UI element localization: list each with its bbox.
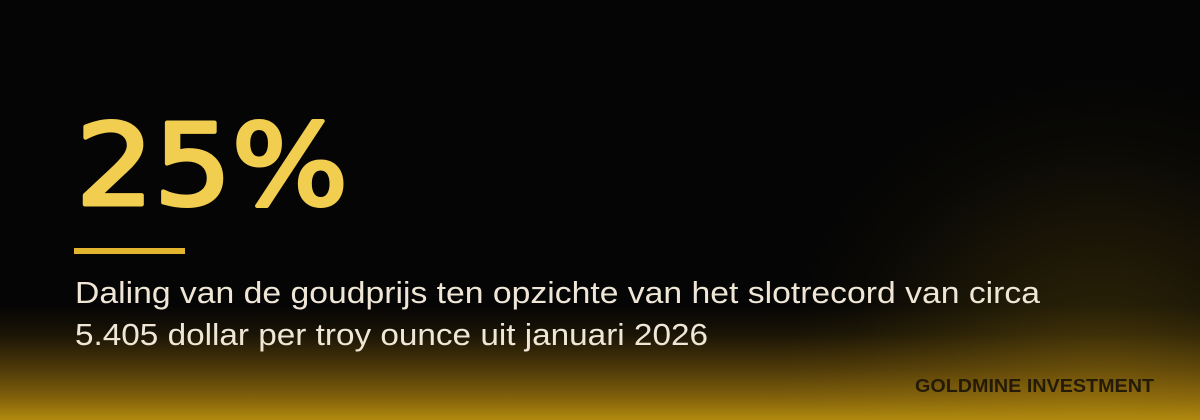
big figure: 25%: 25%: [76, 102, 348, 232]
brand label: GOLDMINE INVESTMENT: [915, 375, 1155, 396]
accent rule: [74, 248, 185, 254]
description text: 5.405 dollar per troy ounce uit januari 2026: [75, 318, 708, 352]
description text: Daling van de goudprijs ten opzichte van het slotrecord van circa: [75, 276, 1040, 310]
description text: [75, 276, 1040, 352]
